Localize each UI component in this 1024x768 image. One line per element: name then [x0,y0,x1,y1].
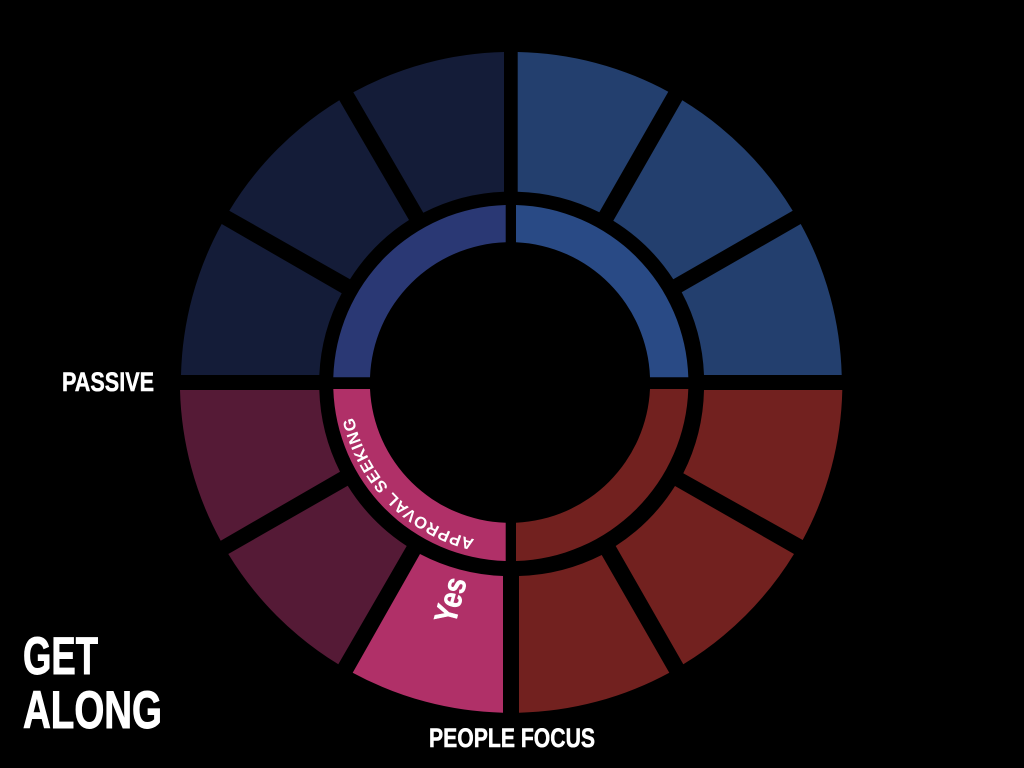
inner ring: approval seeking [333,389,506,561]
inner ring: top-right [516,205,688,377]
label: approval seeking: APPROVAL SEEKING [344,418,474,550]
axis label: people focus: PEOPLE FOCUS [429,723,595,753]
axis label: passive: PASSIVE [62,367,154,397]
title: get along: ALONG [23,681,162,740]
label: Yes: Yes [427,573,474,627]
inner ring: top-left [333,205,506,377]
title: get along: GET [23,627,98,686]
quadrant: bottom-left outer segments [180,390,407,664]
quadrant: top-left outer segments [181,52,504,375]
inner ring: bottom-right [516,389,688,561]
quadrant: bottom-right outer segments [519,390,842,713]
segment: Yes [353,554,503,713]
title: get along [23,627,162,740]
wheel [180,52,842,713]
quadrant: top-right outer segments [518,52,842,375]
